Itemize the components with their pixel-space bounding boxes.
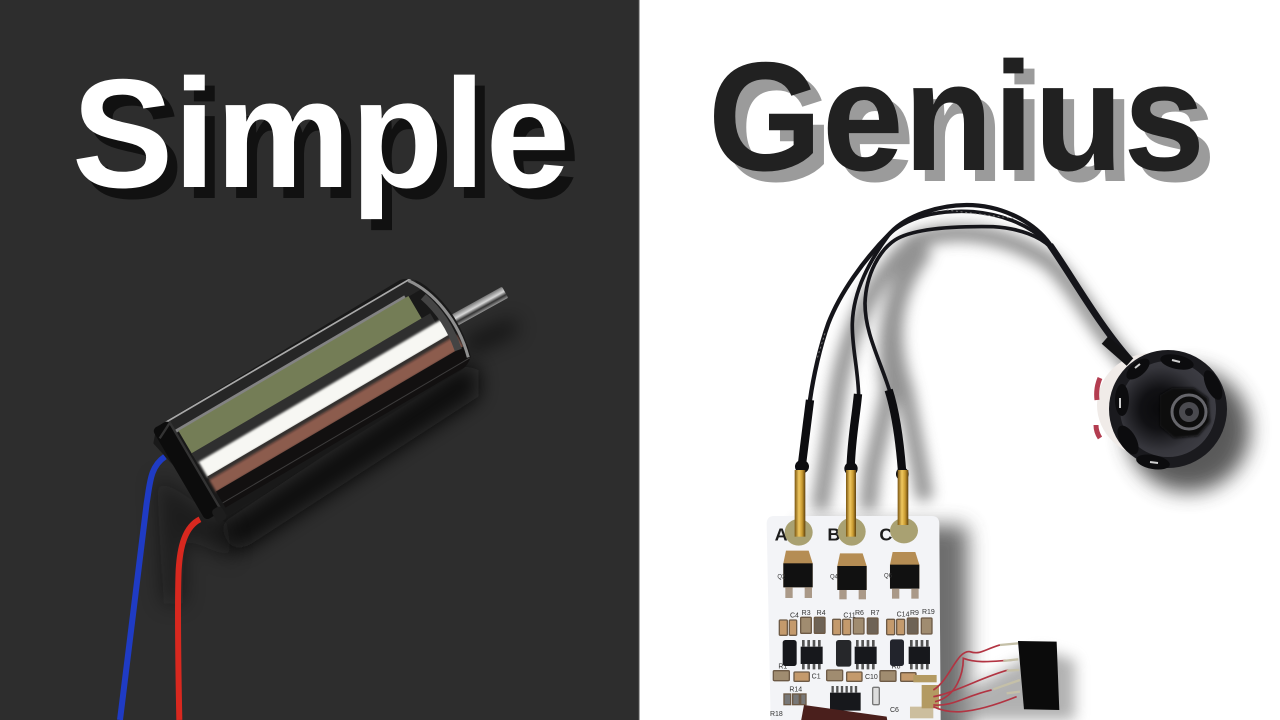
silkscreen labels: R6: [855, 610, 864, 617]
stator sliver: [1097, 353, 1207, 457]
silkscreen labels: R3: [802, 610, 811, 617]
image: brushed DC coreless motor: [120, 266, 518, 720]
heading: Genius: Genius: [708, 30, 1205, 203]
panel: genius (white right side): [639, 0, 1280, 720]
connector shadow: [950, 650, 1075, 720]
silkscreen labels: R8: [892, 663, 901, 670]
silkscreen labels: Q4: [830, 574, 839, 580]
panel: simple (dark left side): [0, 0, 639, 720]
soft shadow of the cables and board: [820, 233, 1150, 510]
MOSFETs: [783, 551, 919, 599]
silkscreen labels: C11: [843, 612, 856, 619]
header solder joints: [910, 675, 939, 718]
pin header: [1018, 641, 1059, 710]
silkscreen labels: R18: [770, 711, 783, 718]
silkscreen labels: R7: [871, 610, 880, 617]
heading: Simple: Simple: [72, 47, 570, 220]
silkscreen labels: C14: [897, 612, 910, 619]
silkscreen labels: C6: [890, 707, 899, 714]
wire B: [850, 211, 1130, 467]
centre divider: [638, 0, 640, 720]
silkscreen labels: C4: [790, 612, 799, 619]
heading: Genius: Genius: [719, 41, 1216, 214]
silkscreen labels: [770, 573, 935, 718]
phase labels: C: [879, 525, 892, 545]
phase labels: B: [827, 525, 840, 545]
silkscreen labels: Q2: [777, 574, 786, 580]
board shadow: [800, 525, 968, 720]
phase labels: A: [775, 525, 788, 545]
silkscreen labels: R4: [817, 610, 826, 617]
silkscreen labels: R19: [922, 609, 935, 616]
red wire: [178, 519, 200, 720]
silver connector leads: [993, 643, 1020, 693]
wire C: [865, 227, 1130, 470]
crystal component: [873, 687, 879, 705]
silkscreen labels: R9: [910, 610, 919, 617]
blue wire: [120, 457, 165, 720]
passive components: [773, 617, 932, 705]
signal wires: [933, 645, 1017, 712]
motor body shadow: [1126, 368, 1250, 492]
motor can: [154, 279, 470, 512]
image: motor wires: [795, 205, 1132, 481]
heading: Simple: Simple: [82, 58, 580, 231]
solder pads and gold pins: [785, 470, 918, 546]
bundled wire to motor: [1050, 245, 1132, 362]
silkscreen labels: R14: [789, 687, 802, 694]
bell housing: [1109, 350, 1227, 468]
silkscreen labels: C1: [812, 673, 821, 680]
heat shrink sleeves: [802, 400, 810, 467]
motor shaft: [452, 287, 508, 326]
board: [767, 516, 941, 720]
silkscreen labels: Q6: [884, 573, 893, 579]
image: driver circuit board: [767, 470, 1059, 720]
housing notches: [1113, 352, 1226, 472]
silkscreen labels: R1: [778, 663, 787, 670]
motor shadow: [157, 320, 518, 603]
wire A: [802, 205, 1130, 467]
red-brown capacitor: [800, 705, 888, 720]
phase labels: [775, 525, 892, 545]
sleeve ends: [795, 460, 909, 481]
notch highlights: [1120, 360, 1180, 463]
wire strain relief: [1105, 340, 1130, 362]
shaft nut: [1160, 388, 1210, 438]
transistors and driver chips: [783, 639, 930, 711]
image: brushless motor: [1096, 350, 1227, 472]
motor end cap: [152, 419, 228, 528]
silkscreen labels: C10: [865, 674, 878, 681]
